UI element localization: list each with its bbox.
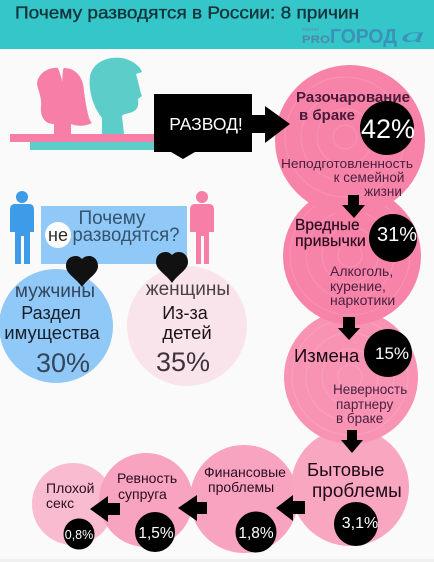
block: Разочарование в браке: в браке (299, 107, 355, 124)
icon: female head (37, 68, 92, 134)
icon: heart left (66, 256, 98, 287)
panel: men: 30% (36, 348, 90, 378)
circle: Ревность супруга (99, 453, 193, 547)
badge 42% (360, 101, 414, 155)
block: Измена: Измена (294, 345, 360, 366)
question box (41, 206, 187, 264)
block: Разочарование в браке: жизни (364, 184, 402, 199)
panel: men (0, 269, 113, 383)
block: Финансовые проблемы: 1,8% (238, 525, 274, 542)
logo: ГОРОД (330, 26, 397, 48)
arrow left 1 (276, 495, 305, 521)
block: Плохой секс: Плохой (46, 480, 94, 496)
panel: women: 35% (156, 347, 210, 377)
block: Бытовые проблемы: проблемы (312, 481, 402, 502)
arrow down 1 (342, 195, 365, 218)
block: Вредные привычки: 31% (377, 224, 417, 246)
icon: male head (90, 58, 142, 134)
block: Разочарование в браке: Разочарование (296, 89, 410, 106)
block: Финансовые проблемы: проблемы (208, 479, 274, 495)
block: Вредные привычки (295, 214, 417, 308)
panel: men: мужчины (15, 281, 95, 302)
panel: men: Раздел (21, 303, 81, 323)
badge 3,1% (334, 502, 378, 546)
silhouettes on pedestal (10, 58, 160, 150)
block: Измена (294, 329, 412, 426)
block: Вредные привычки: привычки (295, 233, 366, 250)
logo: а (401, 25, 425, 47)
block: Плохой секс (46, 480, 94, 550)
icon: man figure (10, 191, 34, 264)
question box: разводятся? (72, 225, 180, 246)
block: Измена: партнеру (336, 397, 394, 412)
panel: women: женщины (146, 279, 230, 300)
logo (302, 25, 425, 48)
block: Вредные привычки: Алкоголь, (330, 263, 393, 279)
circle: Финансовые проблемы (190, 445, 298, 553)
badge 0,8% (64, 518, 94, 550)
icon: woman figure (190, 191, 214, 264)
question box: Почему (78, 208, 146, 229)
circle: Плохой секс (32, 463, 114, 545)
block: Разочарование в браке: 42% (361, 114, 415, 144)
circle: Бытовые проблемы (291, 428, 409, 546)
block: Измена: 15% (375, 344, 409, 363)
pink circles chain (32, 65, 425, 553)
block: Ревность супруга (117, 470, 177, 552)
pedestal teal (30, 142, 160, 150)
title: Почему разводятся в России: 8 причин (15, 2, 359, 22)
circle: Вредные привычки (283, 187, 421, 325)
icon: heart right (156, 252, 188, 283)
arrow down 2 (338, 317, 360, 340)
РАЗВОД box (154, 94, 290, 159)
block: Бытовые проблемы (307, 459, 402, 546)
block: Ревность супруга: Ревность (117, 470, 177, 486)
bottom strip (0, 559, 434, 562)
block: Разочарование в браке: к семейной (334, 170, 404, 185)
block: Разочарование в браке: Неподготовленность (281, 156, 413, 171)
arrow left 3 (90, 496, 120, 522)
block: Ревность супруга: супруга (118, 486, 167, 502)
question box: не (48, 225, 68, 245)
logo: Internet (302, 27, 320, 33)
block: Бытовые проблемы: Бытовые (307, 459, 384, 480)
panel: women: детей (162, 322, 212, 343)
pedestal pink (10, 134, 160, 142)
header banner (0, 0, 434, 49)
block: Вредные привычки: наркотики (330, 292, 395, 308)
block: Измена: в браке (336, 411, 383, 426)
circle: Измена (284, 310, 418, 444)
panel: men: имущества (4, 322, 100, 343)
block: Вредные привычки: курение, (330, 278, 386, 294)
circle: Разочарование в браке (275, 65, 425, 215)
block: Измена: Неверность (333, 382, 407, 397)
badge 1,8% (236, 512, 276, 552)
block: Ревность супруга: 1,5% (138, 525, 174, 542)
panel: women (127, 266, 247, 386)
panel: women: Из-за (162, 303, 209, 323)
block: Плохой секс: 0,8% (65, 528, 93, 542)
arrow left 2 (178, 495, 207, 521)
block: Финансовые проблемы: Финансовые (204, 464, 286, 480)
highlight: не (45, 222, 71, 248)
block: Бытовые проблемы: 3,1% (342, 515, 378, 532)
badge 15% (364, 329, 412, 377)
logo: PRO (302, 34, 331, 46)
badge 31% (369, 214, 417, 262)
block: Разочарование в браке (281, 89, 415, 199)
arrow down 3 (341, 430, 363, 453)
block: Финансовые проблемы (204, 464, 286, 552)
РАЗВОД box: РАЗВОД! (169, 114, 243, 134)
block: Вредные привычки: Вредные (295, 217, 360, 234)
badge 1,5% (135, 512, 175, 552)
block: Плохой секс: секс (46, 495, 74, 511)
